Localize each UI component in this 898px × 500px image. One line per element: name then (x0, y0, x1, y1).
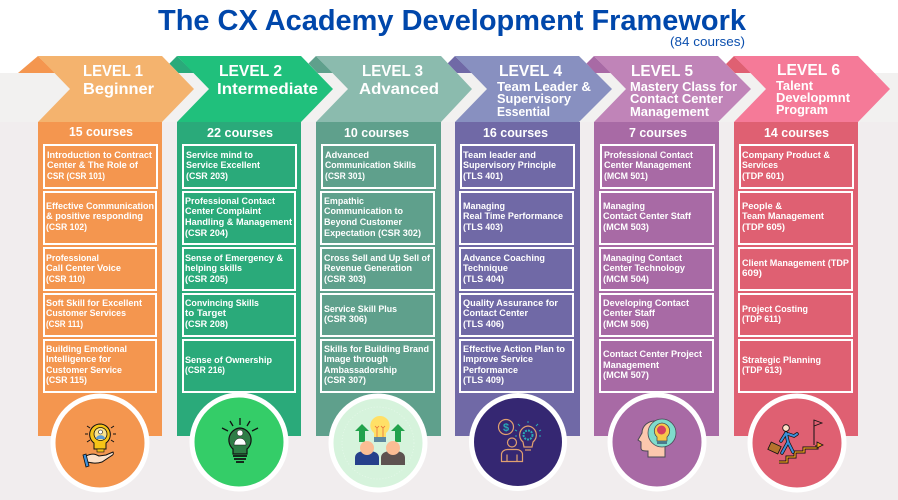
panel: level 6: (TDP 601) (742, 171, 784, 181)
panel: level 2: Intermediate (217, 81, 318, 98)
panel: level 3: Service Skill Plus (324, 304, 397, 314)
panel: level 3: (CSR 307) (324, 375, 366, 385)
panel: level 3: Expectation (CSR 302) (324, 228, 421, 238)
panel: level 4: (TLS 409) (463, 375, 504, 385)
panel: level 2: (CSR 208) (185, 319, 228, 329)
panel: level 4: Team leader and (463, 150, 536, 160)
panel: level 5: (MCM 504) (603, 274, 649, 284)
panel: level 4: Supervisory (497, 91, 572, 106)
panel: level 5: Management (630, 104, 710, 119)
panel: level 3: Advanced (325, 150, 369, 160)
panel: level 6: Developmnt (776, 90, 851, 105)
panel: level 1: Professional (46, 253, 99, 263)
panel: level 5: Contact Center Project (603, 349, 702, 359)
panel: level 1: CSR (CSR 101) (47, 171, 105, 181)
panel: level 2: Service mind to (186, 150, 253, 160)
panel: level 4: Quality Assurance for (463, 298, 558, 308)
panel: level 5: Professional Contact (604, 150, 693, 160)
panel: level 6: LEVEL 6 (777, 62, 840, 79)
panel: level 2 (169, 56, 333, 436)
panel: level 2: (CSR 204) (185, 228, 228, 238)
panel: level 1: (CSR 110) (46, 274, 85, 284)
panel: level 1: (CSR 102) (46, 222, 87, 232)
panel: level 4: Advance Coaching (463, 253, 545, 263)
panel: level 4: Improve Service (463, 354, 533, 364)
panel: level 2: (CSR 216) (185, 365, 225, 375)
panel: level 2: Sense of Emergency & (185, 253, 283, 263)
panel: level 5: Management (603, 360, 659, 370)
panel: level 5: Managing (603, 201, 645, 211)
panel: level 1: Effective Communication (46, 201, 154, 211)
panel: level 6: 14 courses (764, 126, 829, 140)
panel: level 1: Intelligence for (46, 354, 112, 364)
panel: level 3: Skills for Building Brand (324, 344, 429, 354)
panel: level 3: LEVEL 3 (362, 63, 423, 80)
panel: level 3: (CSR 306) (324, 314, 367, 324)
panel: level 4: (TLS 401) (463, 171, 503, 181)
icon: bulb with person (192, 395, 286, 489)
panel: level 5: Center Technology (603, 263, 685, 273)
panel: level 3: Communication Skills (325, 160, 416, 170)
panel: level 4: Contact Center (463, 308, 528, 318)
panel: level 2: LEVEL 2 (219, 63, 282, 80)
panel: level 6: (TDP 613) (742, 365, 782, 375)
panel: level 3: (CSR 303) (324, 274, 366, 284)
panel: level 2: to Target (185, 308, 226, 318)
panel: level 2: Center Complaint (185, 206, 261, 216)
panel: level 3: Image through (324, 354, 388, 364)
panel: level 6: Services (742, 160, 778, 170)
panel: level 5: (MCM 507) (603, 370, 649, 380)
panel: level 2: (CSR 205) (185, 274, 228, 284)
icon: money, gear bulb and person (472, 396, 564, 488)
panel: level 5: 7 courses (629, 126, 687, 140)
panel: level 2: Service Excellent (186, 160, 260, 170)
panel: level 1: & positive responding (46, 211, 143, 221)
panel: level 5: Mastery Class for (630, 79, 737, 94)
panel: level 6: Talent (776, 78, 814, 93)
panel: level 4: (TLS 404) (463, 274, 504, 284)
panel: level 6: (TDP 605) (742, 222, 785, 232)
panel: level 4: Essential (497, 104, 550, 119)
title: The CX Academy Development Framework (158, 5, 747, 37)
panel: level 5: (MCM 503) (603, 222, 649, 232)
icon: person climbing stairs to flag (750, 396, 844, 490)
panel: level 2: Professional Contact (185, 196, 275, 206)
panel: level 3: (CSR 301) (325, 171, 365, 181)
panel: level 3: Communication to (324, 206, 403, 216)
panel: level 1: LEVEL 1 (83, 63, 143, 80)
panel: level 5: LEVEL 5 (631, 63, 693, 80)
panel: level 5: Contact Center (630, 91, 723, 106)
icon: idea team with arrows (331, 396, 425, 490)
panel: level 5: (MCM 501) (604, 171, 648, 181)
panel: level 1: Introduction to Contract (47, 150, 152, 160)
panel: level 4: 16 courses (483, 126, 548, 140)
panel: level 4 (448, 56, 612, 436)
panel: level 4: Supervisory Principle (463, 160, 556, 170)
panel: level 3 (308, 56, 472, 436)
panel: level 6: People & (742, 201, 783, 211)
panel: level 6: Program (776, 102, 828, 117)
panel: level 5: Managing Contact (603, 253, 682, 263)
panel: level 2: Sense of Ownership (185, 355, 272, 365)
panel: level 6: 609) (742, 268, 762, 278)
panel: level 3: Ambassadorship (324, 365, 397, 375)
panel: level 3: Beyond Customer (324, 217, 402, 227)
panel: level 3: 10 courses (344, 126, 409, 140)
icon: bulb over open hand (53, 396, 147, 490)
panel: level 4: Technique (463, 263, 508, 273)
panel: level 1: Call Center Voice (46, 263, 121, 273)
panel: level 1: 15 courses (69, 125, 133, 139)
panel: level 6: Company Product & (742, 150, 830, 160)
panel: level 1: Customer Service (46, 365, 122, 375)
panel: level 5: Developing Contact (603, 298, 689, 308)
icon: money, gear bulb and person: $ (503, 422, 509, 434)
panel: level 2: Convincing Skills (185, 298, 259, 308)
panel: level 2: Handling & Management (185, 217, 292, 227)
panel: level 5: Center Staff (603, 308, 656, 318)
panel: level 6: Team Management (742, 211, 824, 221)
panel: level 1: Building Emotional (46, 344, 127, 354)
panel: level 3: Cross Sell and Up Sell of (324, 253, 431, 263)
panel: level 1: Center & The Role of (47, 160, 139, 170)
panel: level 4: (TLS 406) (463, 319, 504, 329)
icon: head with idea bulb (610, 395, 704, 489)
panel: level 4: Effective Action Plan to (463, 344, 566, 354)
panel: level 6: Project Costing (742, 304, 808, 314)
panel: level 1: (CSR 111) (46, 319, 83, 329)
panel: level 1: Beginner (83, 81, 154, 98)
panel: level 6: Strategic Planning (742, 355, 821, 365)
panel: level 2: (CSR 203) (186, 171, 228, 181)
panel: level 6: Client Management (TDP (742, 258, 849, 268)
panel: level 1: (CSR 115) (46, 375, 87, 385)
panel: level 4: (TLS 403) (463, 222, 503, 232)
panel: level 4: LEVEL 4 (499, 63, 562, 80)
panel: level 6 (726, 56, 890, 436)
panel: level 1: Soft Skill for Excellent (46, 298, 142, 308)
panel: level 5: Contact Center Staff (603, 211, 692, 221)
panel: level 4: Performance (463, 365, 518, 375)
panel: level 3: Revenue Generation (324, 263, 412, 273)
panel: level 5: Center Management (604, 160, 691, 170)
panel: level 2: helping skills (185, 263, 242, 273)
panel: level 4: Real Time Performance (463, 211, 563, 221)
panel: level 2: 22 courses (207, 126, 273, 140)
panel: level 1 (18, 56, 194, 436)
panel: level 6: (TDP 611) (742, 314, 781, 324)
subtitle: total courses: (84 courses) (670, 35, 745, 49)
panel: level 4: Managing (463, 201, 505, 211)
panel: level 3: Advanced (359, 81, 439, 98)
panel: level 4: Team Leader & (497, 79, 591, 94)
panel: level 3: Empathic (324, 196, 364, 206)
panel: level 5: (MCM 506) (603, 319, 649, 329)
panel: level 5 (586, 56, 751, 436)
panel: level 1: Customer Services (46, 308, 126, 318)
